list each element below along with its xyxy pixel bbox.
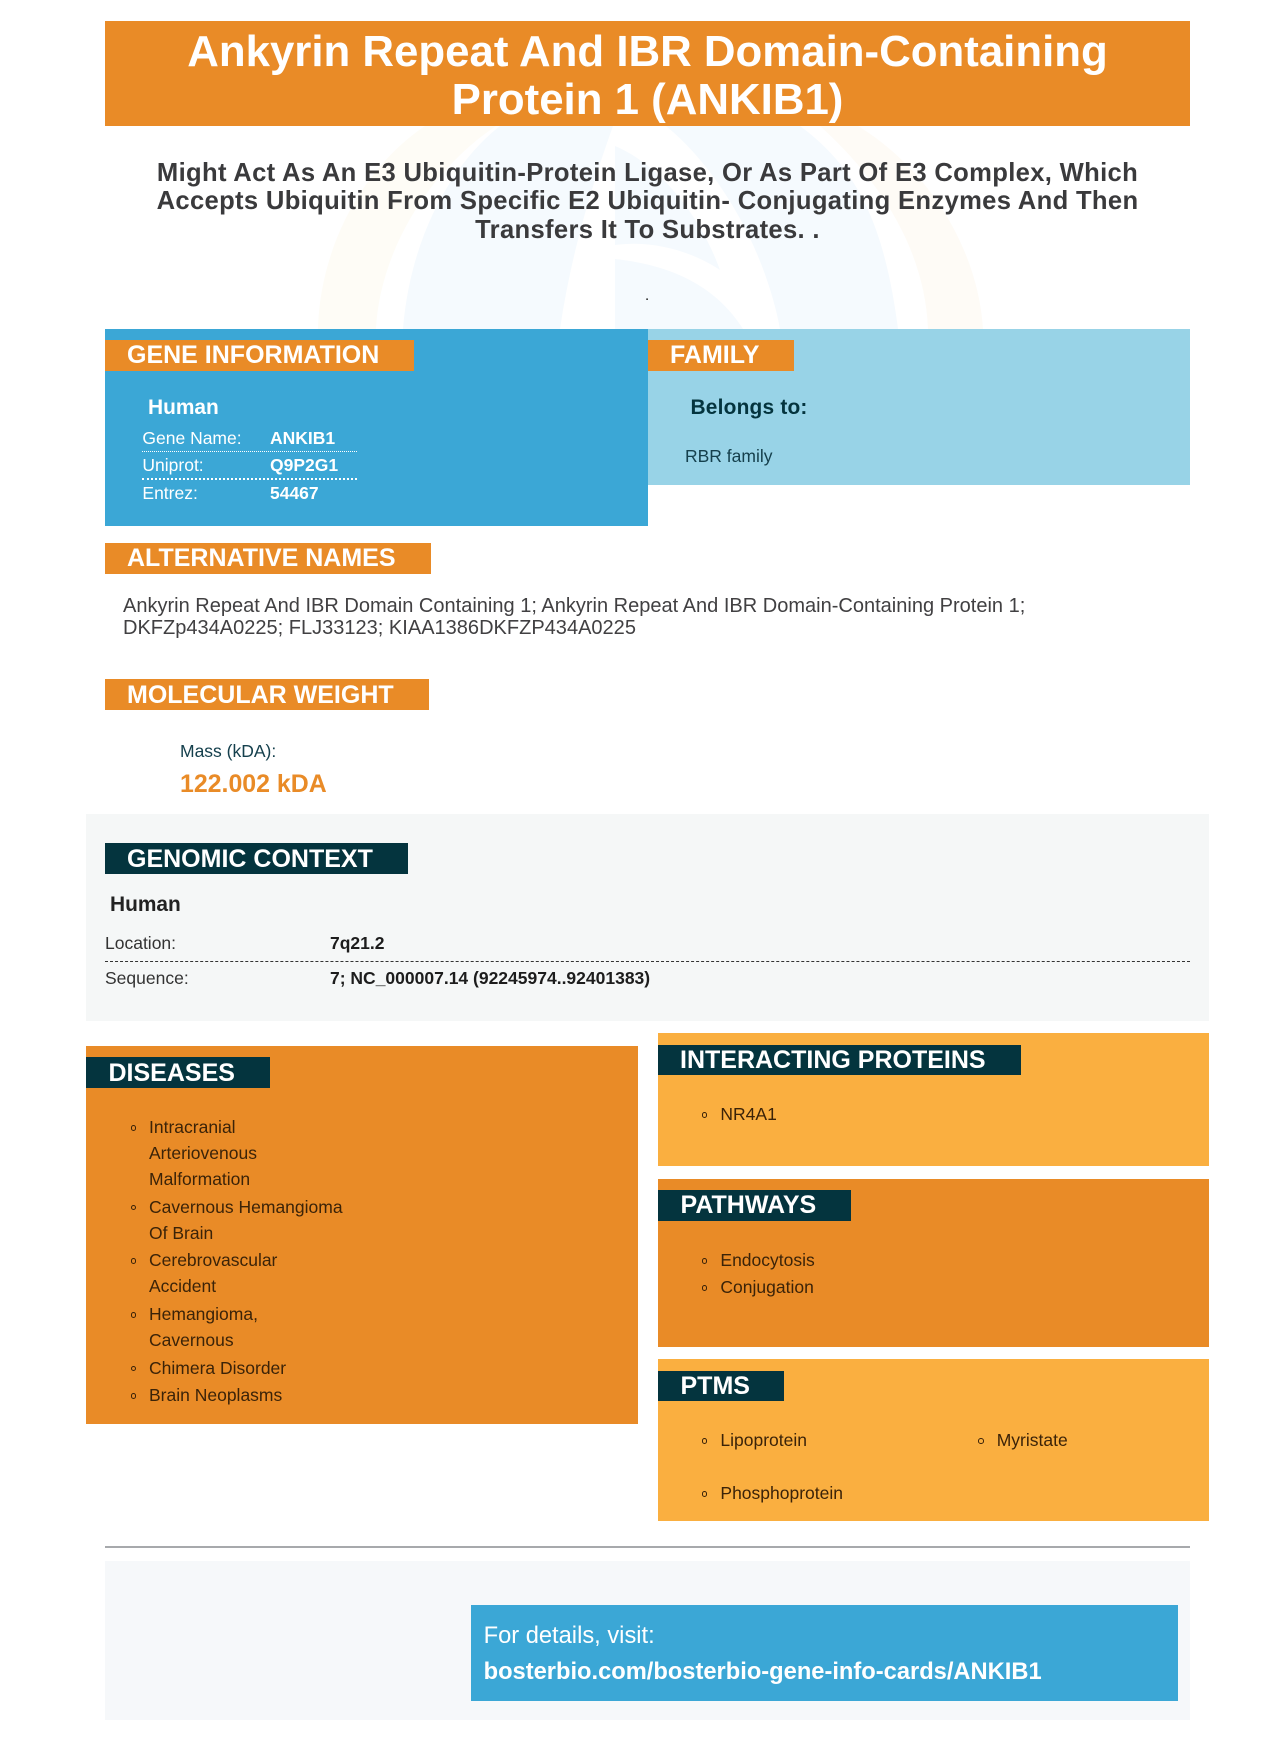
alternative names text: Ankyrin Repeat And IBR Domain Containing 1; Ankyrin Repeat And IBR Domain-Containing Protein 1; [123,594,1025,616]
title: Ankyrin Repeat And IBR Domain-Containing [187,27,1108,76]
title: Protein 1 (ANKIB1) [452,75,843,124]
sequence row: 7; NC_000007.14 (92245974..92401383) [330,968,650,988]
disease list [131,1117,343,1405]
uniprot row [142,455,338,475]
alternative names text: DKFZp434A0225; FLJ33123; KIAA1386DKFZP434A0225 [123,616,636,638]
ptms list: Lipoprotein [720,1430,807,1450]
heading: pathways [658,1190,851,1221]
callout: details link [471,1605,1178,1701]
heading: pathways: PATHWAYS [680,1191,816,1219]
ptms list: Phosphoprotein [720,1483,843,1503]
background watermark logo [318,126,983,329]
species: Human [148,396,219,419]
disease list: Hemangioma, [149,1304,258,1324]
gene name row: ANKIB1 [270,428,335,448]
mass label: Mass (kDA): [180,741,276,761]
disease list: Cavernous [149,1330,234,1350]
heading: molecular weight: MOLECULAR WEIGHT [127,681,394,709]
location row: Location: [105,933,176,953]
dot text: . [645,287,649,304]
disease list: Malformation [149,1169,250,1189]
pathways list: Endocytosis [720,1250,815,1270]
family value: RBR family [685,446,773,466]
entrez row [142,483,319,503]
pathways list: Conjugation [720,1277,814,1297]
sequence row: Sequence: [105,968,189,988]
details label: For details, visit: [484,1623,655,1649]
heading: diseases [86,1057,270,1088]
panel: diseases [86,1046,638,1424]
panel: ptms [658,1359,1209,1521]
interacting list: NR4A1 [720,1104,777,1124]
panel: interacting proteins [658,1033,1209,1166]
subtitle description: Accepts Ubiquitin From Specific E2 Ubiquitin- Conjugating Enzymes And Then [157,187,1138,215]
location row [105,933,384,953]
heading: ptms [658,1371,784,1401]
sequence row [105,968,650,988]
panel: pathways [658,1179,1209,1347]
uniprot row: Q9P2G1 [270,455,338,475]
disease list: Chimera Disorder [149,1358,286,1378]
entrez row: Entrez: [142,483,198,503]
ptms list [702,1430,1068,1503]
ptms list: Myristate [997,1430,1068,1450]
subtitle description: Might Act As An E3 Ubiquitin-Protein Ligase, Or As Part Of E3 Complex, Which [157,158,1138,186]
belongs to label: Belongs to: [690,396,808,419]
heading: diseases: DISEASES [108,1059,235,1087]
pathways list [702,1250,815,1297]
subtitle description [157,158,1138,244]
disease list: Cavernous Hemangioma [149,1197,343,1217]
heading: family [648,340,794,371]
heading: ptms: PTMS [680,1372,750,1400]
panel: gene information [105,329,648,526]
alternative names text [123,594,1025,638]
heading: family: FAMILY [670,341,759,369]
panel: genomic context [86,814,1209,1021]
subtitle description: Transfers It To Substrates. . [475,216,820,244]
disease list: Intracranial [149,1117,236,1137]
uniprot row: Uniprot: [142,455,204,475]
disease list: Accident [149,1276,216,1296]
disease list: Of Brain [149,1223,213,1243]
gene name row [142,428,335,448]
mass value: 122.002 kDA [180,770,327,798]
gene name row: Gene Name: [142,428,242,448]
heading: alternative names: ALTERNATIVE NAMES [127,544,396,572]
location row: 7q21.2 [330,933,384,953]
entrez row: 54467 [270,483,319,503]
title [105,21,1190,126]
disease list: Cerebrovascular [149,1250,277,1270]
panel: footer [105,1561,1190,1720]
disease list: Brain Neoplasms [149,1385,282,1405]
disease list: Arteriovenous [149,1143,257,1163]
heading: interacting proteins: INTERACTING PROTEINS [680,1046,986,1074]
details url: bosterbio.com/bosterbio-gene-info-cards/ANKIB1 [484,1659,1042,1685]
species: Human [110,893,181,916]
heading: gene information: GENE INFORMATION [127,341,379,369]
panel: family [648,329,1190,485]
heading: genomic context: GENOMIC CONTEXT [127,845,373,873]
